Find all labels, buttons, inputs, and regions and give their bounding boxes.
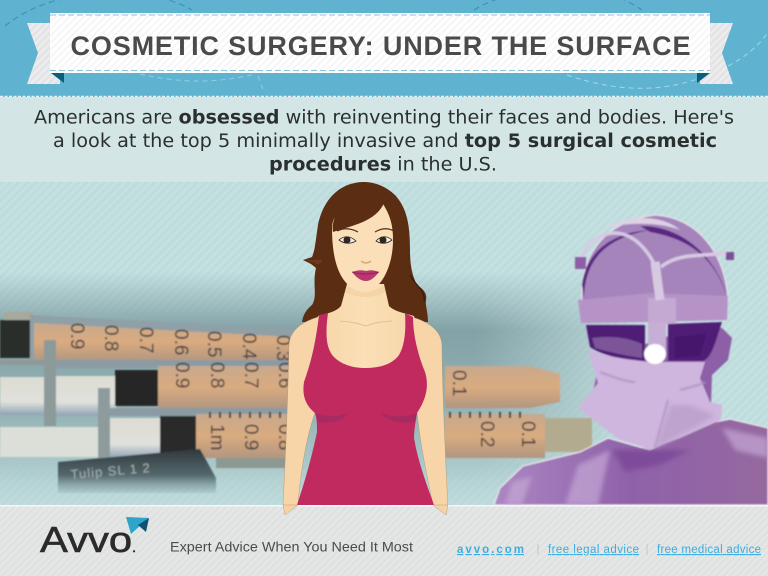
collarbones <box>340 321 392 326</box>
syringe 1: 0.9 <box>66 323 87 349</box>
syringe 2: 0.9 <box>171 362 192 388</box>
syringe 2 <box>0 340 560 426</box>
ribbon left tail <box>27 23 60 84</box>
woman's arm tips <box>283 505 448 515</box>
syringe 2: 0.7 <box>240 362 261 388</box>
woman illustration <box>283 182 448 516</box>
lips <box>352 270 379 281</box>
title: COSMETIC SURGERY: UNDER THE SURFACE <box>70 31 690 61</box>
syringe 3: 0.8 <box>274 424 295 450</box>
syringe 2: 0.8 <box>206 362 227 388</box>
syringe 1: 0.7 <box>135 327 156 353</box>
tank top <box>297 313 434 505</box>
syringe 1: 0.3 <box>272 335 293 361</box>
syringe 2: 0.6 <box>274 362 295 388</box>
tank top shading <box>315 412 417 423</box>
syringe 2: 0.1 <box>448 370 469 396</box>
headlamp arms <box>578 233 655 266</box>
footer links: free medical advice <box>657 544 761 556</box>
head cap <box>582 215 728 300</box>
syringe 1: 0.6 <box>170 329 191 355</box>
ear and neck <box>590 325 732 405</box>
ribbon body <box>50 13 710 73</box>
syringe 1 <box>0 312 330 362</box>
surgical gown <box>494 419 768 505</box>
brows and eyes <box>337 229 394 232</box>
syringes photo <box>0 312 592 493</box>
ribbon right tail <box>700 23 733 84</box>
intro text: a look at the top 5 minimally invasive and top 5 surgical cosmetic <box>53 131 717 152</box>
syringe 1: 0.8 <box>100 325 121 351</box>
photo background <box>0 182 768 506</box>
nose <box>361 261 371 263</box>
chest and neck <box>304 284 426 382</box>
footer links: free legal advice <box>548 544 639 556</box>
syringe 3: 0.9 <box>240 424 261 450</box>
needle cap label: Tulip SL 1 2 <box>70 460 151 482</box>
syringe 3 <box>0 388 592 474</box>
head band <box>578 293 728 323</box>
Avvo logo: Avvo . <box>40 519 136 560</box>
surgeon photo <box>494 215 768 505</box>
title ribbon <box>27 13 733 84</box>
intro text <box>34 108 734 176</box>
syringe 3: 0.1 <box>517 421 538 447</box>
tagline: Expert Advice When You Need It Most <box>170 540 413 554</box>
syringe 3: 1m <box>206 424 227 450</box>
header band <box>0 0 768 97</box>
footer links <box>457 544 761 556</box>
syringe 3: 0.2 <box>476 421 497 447</box>
right arm <box>400 314 448 516</box>
needle cap label <box>58 449 216 493</box>
face mask <box>578 349 722 449</box>
goggles <box>586 322 722 361</box>
syringe 1: 0.4 <box>238 333 259 360</box>
footer links: avvo.com <box>457 544 524 556</box>
intro text: procedures in the U.S. <box>269 154 497 176</box>
hair <box>302 182 428 322</box>
face <box>332 204 393 292</box>
footer <box>0 505 768 576</box>
syringe 1: 0.5 <box>203 331 224 357</box>
logo arrow <box>126 517 149 534</box>
left arm <box>283 314 330 515</box>
headlamp <box>644 344 666 364</box>
intro text: Americans are obsessed with reinventing their faces and bodies. Here's <box>34 108 734 128</box>
intro band <box>0 96 768 182</box>
